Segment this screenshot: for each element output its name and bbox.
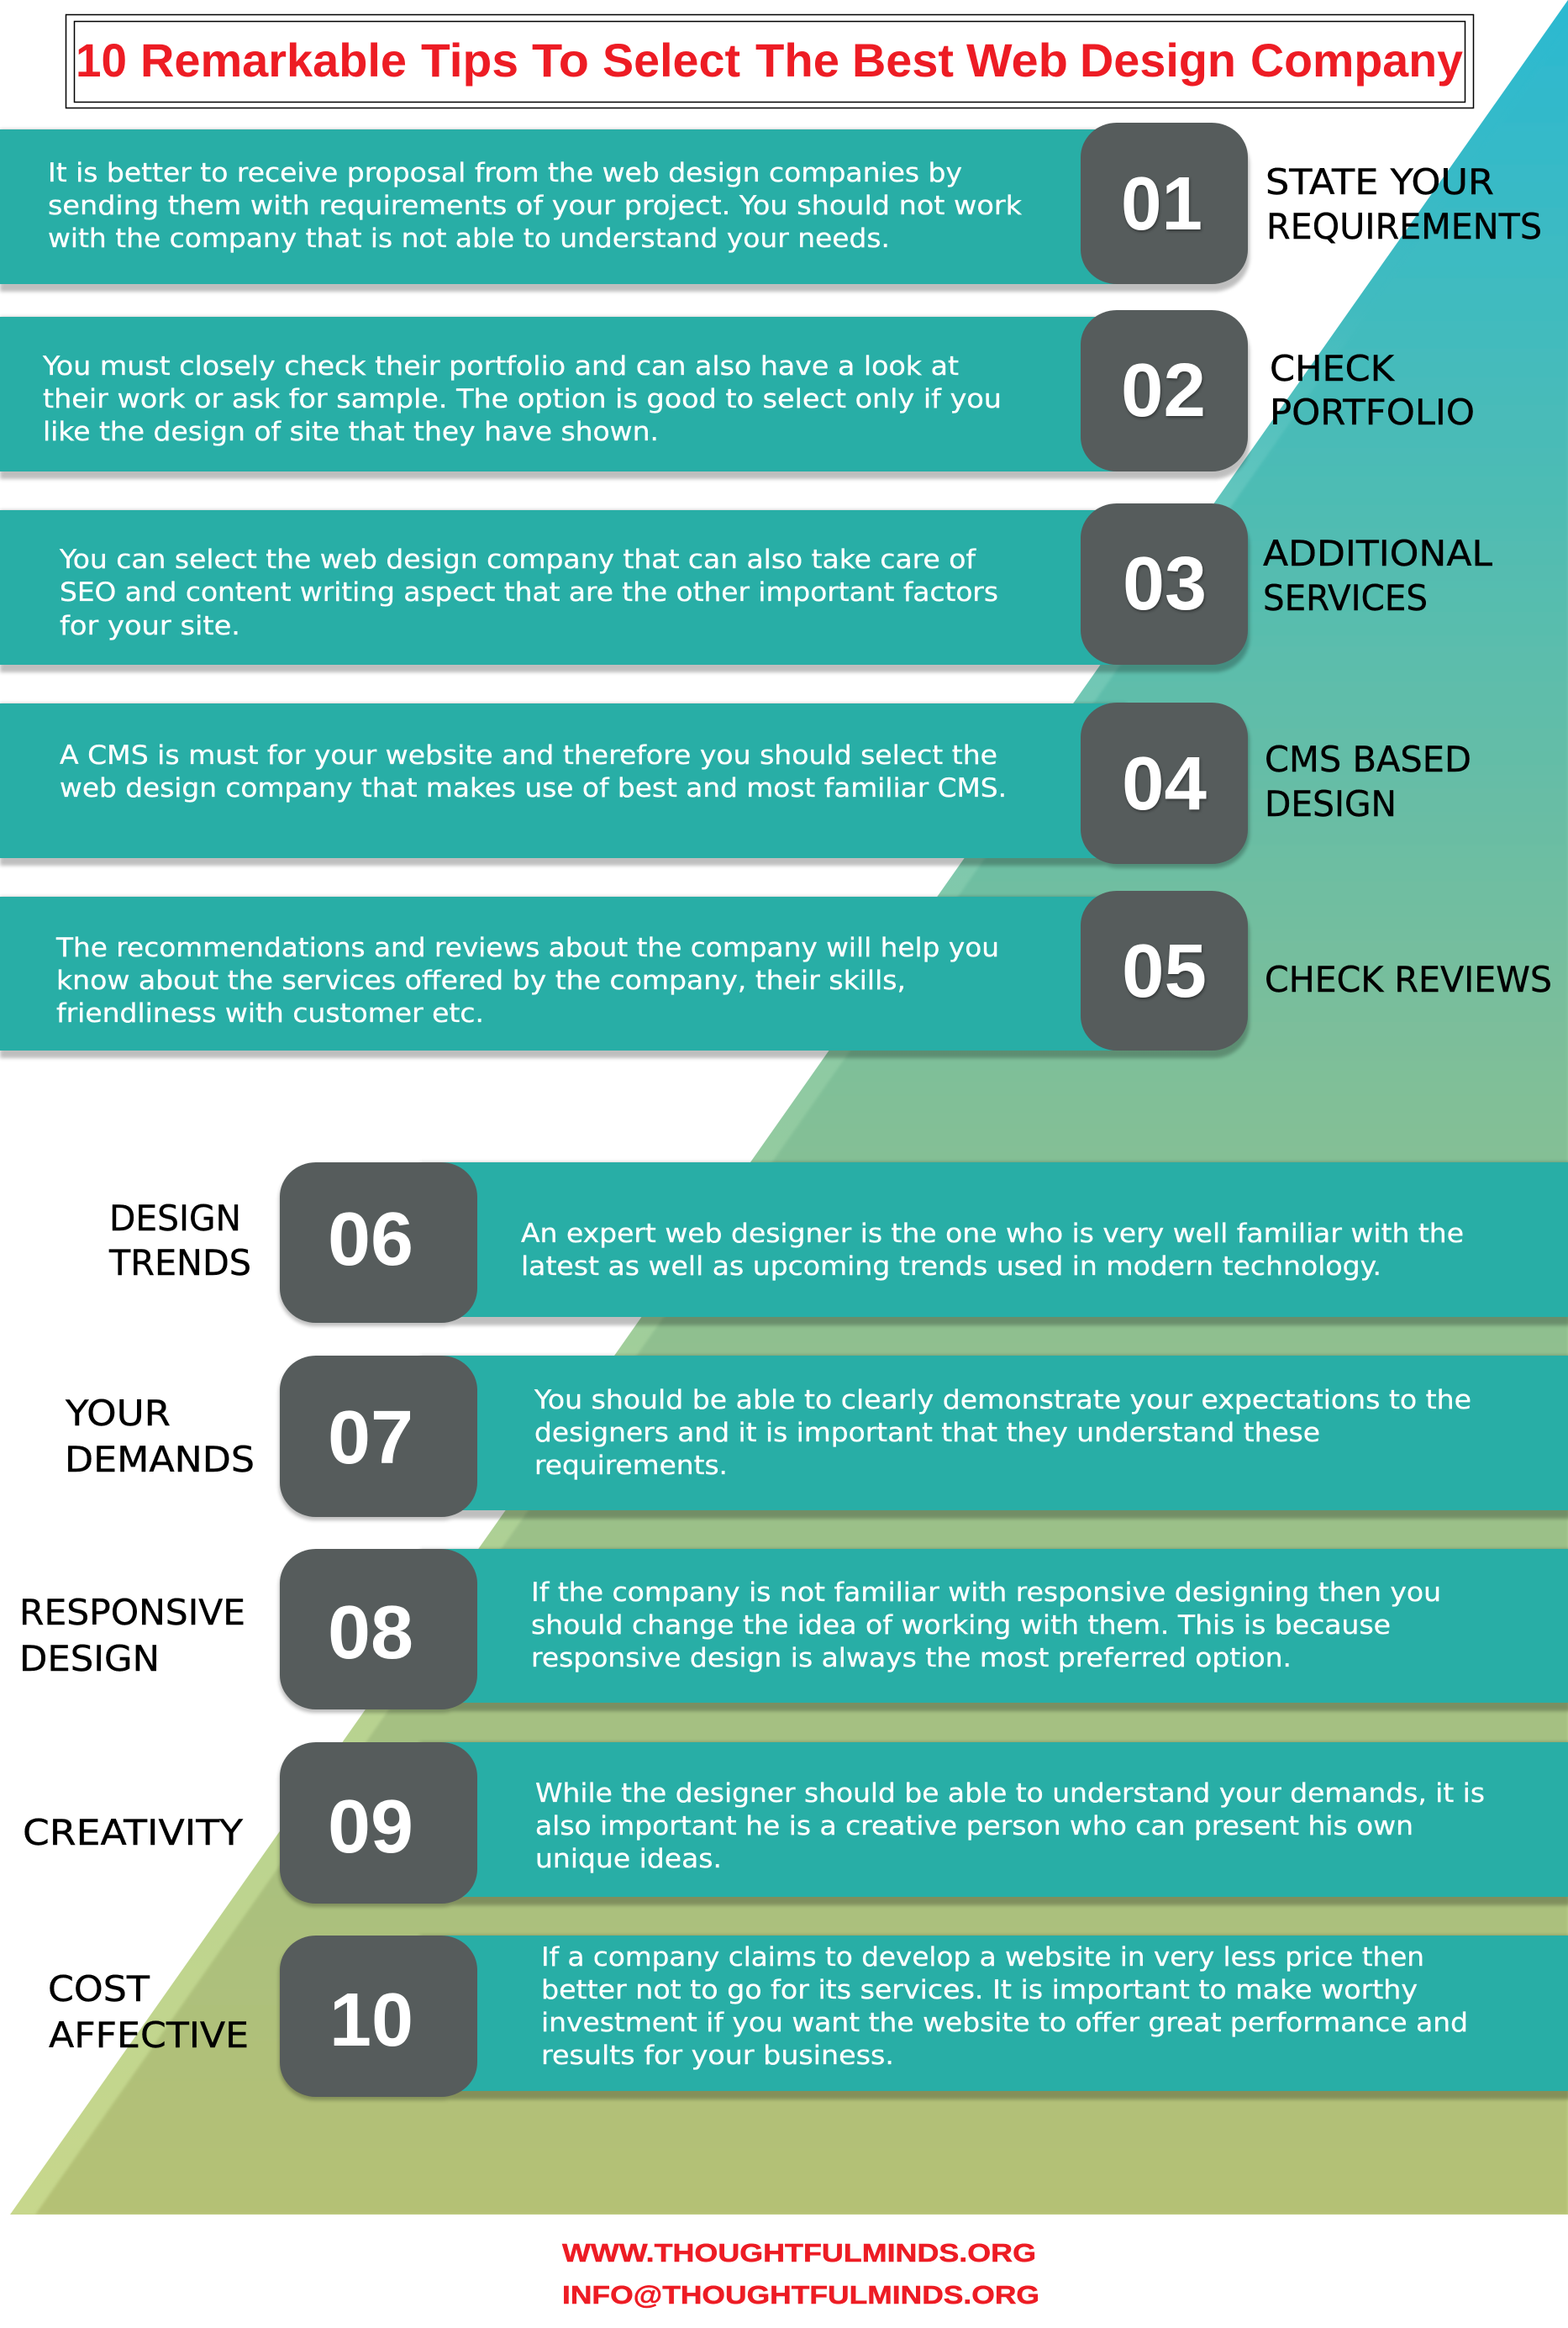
panel: tip 03 additional services bbox=[0, 503, 1493, 672]
panel: tip 05 check reviews bbox=[0, 891, 1552, 1058]
tip 07 text: requirements. bbox=[534, 1451, 728, 1481]
tip 10 text: better not to go for its services. It is important to make worthy bbox=[541, 1975, 1418, 2005]
tip 01 text: sending them with requirements of your project. You should not work bbox=[48, 191, 1022, 221]
tip 10 text: If a company claims to develop a website in very less price then bbox=[541, 1942, 1424, 1972]
title: Company bbox=[1250, 34, 1463, 87]
label 03: SERVICES bbox=[1263, 577, 1428, 619]
tip 07 text: designers and it is important that they understand these bbox=[534, 1418, 1320, 1448]
label 04: DESIGN bbox=[1265, 783, 1397, 824]
bar 04 bbox=[0, 703, 1250, 868]
title: Select bbox=[602, 34, 740, 87]
badge 05 bbox=[1081, 891, 1248, 1051]
label 04: CMS BASED bbox=[1265, 739, 1471, 780]
tip 01 text: It is better to receive proposal from the web design companies by bbox=[48, 158, 962, 188]
panel: tip 02 check portfolio bbox=[0, 310, 1475, 479]
panel: tip 07 your demands bbox=[65, 1356, 1568, 1520]
bar 08 bbox=[279, 1549, 1568, 1713]
tip 05 text: know about the services offered by the company, their skills, bbox=[56, 966, 906, 996]
badge 09 bbox=[280, 1742, 477, 1904]
email: INFO@THOUGHTFULMINDS.ORG bbox=[562, 2280, 1039, 2310]
badge 01: 01 bbox=[1121, 162, 1202, 246]
label 01: REQUIREMENTS bbox=[1266, 206, 1542, 247]
footer contact bbox=[562, 2238, 1039, 2310]
label 08: DESIGN bbox=[19, 1638, 160, 1679]
tip 09 text: unique ideas. bbox=[535, 1844, 722, 1874]
title: To bbox=[532, 34, 589, 87]
badge 03: 03 bbox=[1123, 542, 1207, 626]
title: Tips bbox=[421, 34, 518, 87]
label 08: RESPONSIVE bbox=[19, 1592, 245, 1633]
tip 07 text: You should be able to clearly demonstrate your expectations to the bbox=[534, 1385, 1471, 1415]
tip 08 text: If the company is not familiar with responsive designing then you bbox=[531, 1577, 1441, 1608]
title: Web bbox=[966, 34, 1068, 87]
badge 02: 02 bbox=[1121, 349, 1206, 433]
badge 06: 06 bbox=[328, 1198, 413, 1282]
badge 10 bbox=[280, 1936, 477, 2097]
label 07: YOUR bbox=[65, 1393, 171, 1434]
panel: tip 10 cost affective bbox=[48, 1936, 1568, 2100]
tip 04 text: A CMS is must for your website and therefore you should select the bbox=[60, 740, 997, 771]
tip 02 text: like the design of site that they have shown. bbox=[43, 417, 659, 447]
label 10: AFFECTIVE bbox=[49, 2015, 249, 2056]
badge 07 bbox=[280, 1356, 477, 1517]
label 09: CREATIVITY bbox=[23, 1812, 243, 1853]
panel: tip 04 cms based design bbox=[0, 703, 1471, 868]
website: WWW.THOUGHTFULMINDS.ORG bbox=[562, 2238, 1036, 2267]
badge 04: 04 bbox=[1122, 742, 1207, 826]
badge 06 bbox=[280, 1162, 477, 1323]
tip 01 text: with the company that is not able to understand your needs. bbox=[48, 224, 890, 254]
tip 06 text: An expert web designer is the one who is very well familiar with the bbox=[521, 1219, 1464, 1249]
tip 06 text: latest as well as upcoming trends used in modern technology. bbox=[521, 1251, 1381, 1282]
tip 04 text: web design company that makes use of best and most familiar CMS. bbox=[60, 773, 1007, 803]
bar 05 bbox=[0, 897, 1250, 1058]
label 01: STATE YOUR bbox=[1265, 161, 1494, 203]
badge 04 bbox=[1081, 703, 1248, 864]
bar 09 bbox=[279, 1742, 1568, 1907]
label 05: CHECK REVIEWS bbox=[1265, 959, 1552, 1000]
badge 09: 09 bbox=[328, 1785, 413, 1869]
panel: tip 01 state your requirements bbox=[0, 123, 1542, 292]
panel: tip 06 design trends bbox=[108, 1162, 1568, 1326]
badge 03 bbox=[1081, 503, 1248, 665]
label 06: DESIGN bbox=[109, 1198, 241, 1239]
badge 08: 08 bbox=[328, 1591, 413, 1675]
title: Remarkable bbox=[140, 34, 407, 87]
tip 09 text: also important he is a creative person who can present his own bbox=[535, 1811, 1413, 1841]
badge 10: 10 bbox=[329, 1978, 413, 2062]
panel: tip 09 creativity bbox=[23, 1742, 1568, 1907]
label 07: DEMANDS bbox=[65, 1439, 255, 1480]
tip 09 text: While the designer should be able to understand your demands, it is bbox=[535, 1778, 1485, 1809]
tip 02 text: their work or ask for sample. The option is good to select only if you bbox=[43, 384, 1002, 414]
title: Design bbox=[1080, 34, 1236, 87]
tip 08 text: responsive design is always the most preferred option. bbox=[531, 1643, 1292, 1673]
tip 03 text: SEO and content writing aspect that are the other important factors bbox=[60, 577, 998, 608]
label 10: COST bbox=[48, 1968, 150, 2009]
tip 10 text: results for your business. bbox=[541, 2041, 894, 2071]
tip 08 text: should change the idea of working with them. This is because bbox=[531, 1610, 1391, 1641]
tip 10 text: investment if you want the website to offer great performance and bbox=[541, 2008, 1468, 2038]
tip 03 text: You can select the web design company that can also take care of bbox=[59, 545, 976, 575]
badge 08 bbox=[280, 1549, 477, 1709]
bar 10 bbox=[279, 1936, 1568, 2100]
title: Best bbox=[852, 34, 954, 87]
title box bbox=[66, 15, 1474, 108]
tip 02 text: You must closely check their portfolio and can also have a look at bbox=[42, 351, 959, 382]
tip 05 text: The recommendations and reviews about the company will help you bbox=[55, 933, 999, 963]
badge 01 bbox=[1081, 123, 1248, 284]
bar 07 bbox=[279, 1356, 1568, 1520]
bar 03 bbox=[0, 510, 1250, 672]
label 02: CHECK bbox=[1270, 348, 1395, 389]
bar 06 bbox=[279, 1162, 1568, 1326]
panel: tip 08 responsive design bbox=[19, 1549, 1568, 1713]
label 03: ADDITIONAL bbox=[1263, 533, 1493, 574]
label 06: TRENDS bbox=[108, 1242, 251, 1283]
badge 02 bbox=[1081, 310, 1248, 471]
title: The bbox=[755, 34, 839, 87]
bar 02 bbox=[0, 317, 1250, 479]
title: 10 bbox=[76, 34, 127, 87]
label 02: PORTFOLIO bbox=[1270, 392, 1475, 433]
badge 05: 05 bbox=[1122, 930, 1207, 1014]
badge 07: 07 bbox=[328, 1396, 413, 1480]
bar 01 bbox=[0, 129, 1250, 292]
tip 03 text: for your site. bbox=[60, 611, 240, 641]
tip 05 text: friendliness with customer etc. bbox=[56, 998, 484, 1029]
